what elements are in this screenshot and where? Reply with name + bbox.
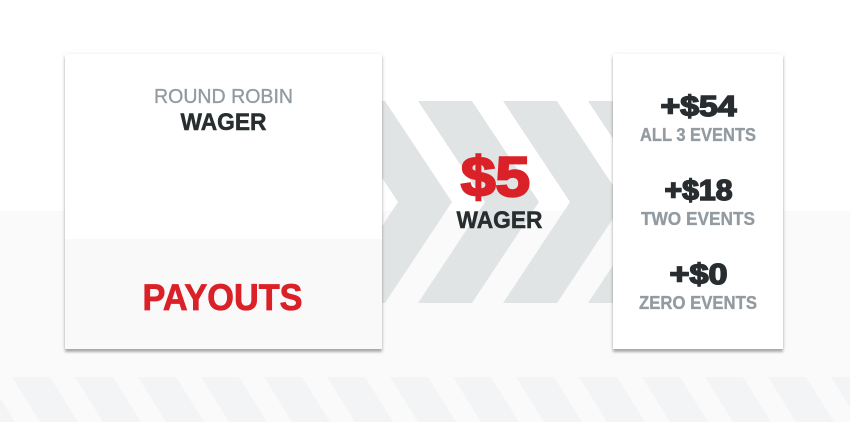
payout: two events: TWO EVENTS	[641, 209, 755, 229]
chevron arrows	[331, 101, 709, 303]
heading: payouts: PAYOUTS	[142, 276, 302, 318]
payout: zero events: ZERO EVENTS	[639, 293, 757, 313]
payout: zero events: +$0	[670, 259, 728, 291]
payout: all 3 events	[640, 91, 756, 145]
bottom diagonal stripes	[0, 377, 850, 422]
payout: two events: +$18	[664, 175, 732, 207]
amount: $5: $5	[461, 145, 530, 208]
label: wager: WAGER	[456, 207, 542, 234]
payout: all 3 events: ALL 3 EVENTS	[640, 125, 756, 145]
panel: payouts list	[613, 54, 783, 349]
panel lower section	[65, 239, 382, 349]
payout: zero events	[639, 259, 757, 313]
payout: all 3 events: +$54	[660, 91, 736, 123]
background band	[0, 211, 850, 422]
heading: wager: WAGER	[180, 109, 266, 136]
payout: two events	[641, 175, 755, 229]
label: round robin: ROUND ROBIN	[154, 86, 293, 108]
wager amount	[456, 145, 542, 234]
panel: round robin wager	[65, 54, 382, 349]
